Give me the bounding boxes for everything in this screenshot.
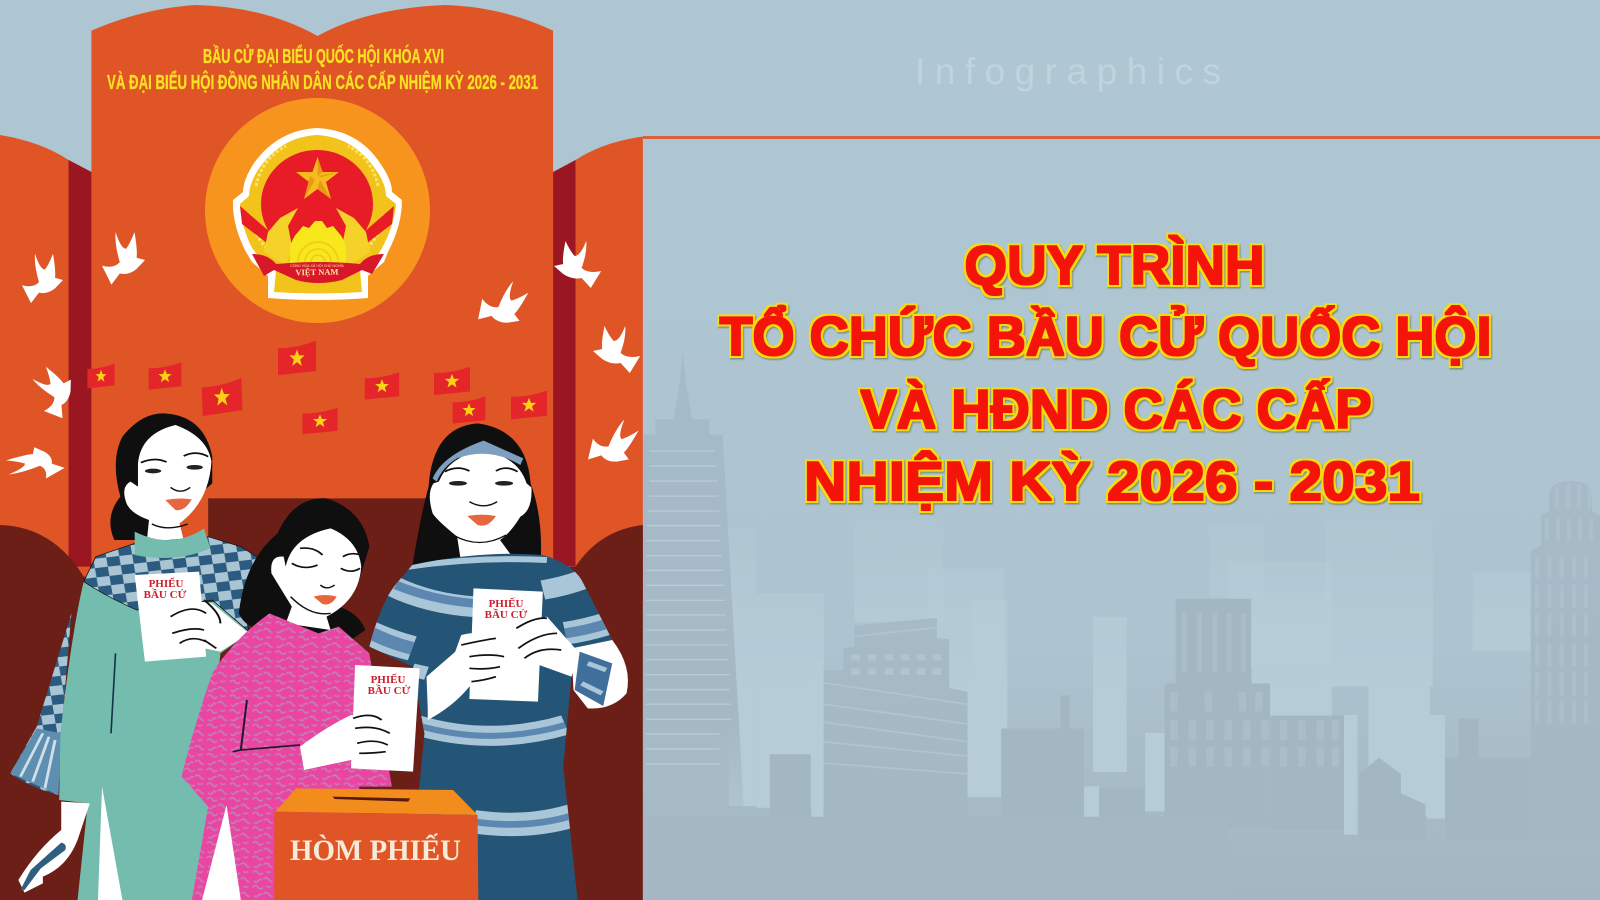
building: stepped block xyxy=(824,618,968,847)
title: NHIỆM KỲ 2026 - 2031 xyxy=(804,450,1420,512)
panel: city skyline background xyxy=(640,352,1600,900)
ballot xyxy=(469,588,543,702)
ballot box xyxy=(274,788,478,900)
ballot labels: PHIẾU xyxy=(489,597,523,610)
ballot labels: BẦU CỬ xyxy=(368,684,411,697)
voter: right woman xyxy=(369,423,628,900)
lower poster and voters xyxy=(0,413,643,900)
title xyxy=(720,234,1492,512)
arm xyxy=(571,640,628,708)
poster heading xyxy=(107,44,538,94)
icons: white doves xyxy=(5,232,646,485)
ballot xyxy=(135,572,206,662)
header rule xyxy=(643,136,1600,139)
national emblem: VIỆT NAM xyxy=(295,267,339,277)
poster heading: VÀ ĐẠI BIỂU HỘI ĐỒNG NHÂN DÂN CÁC CẤP NHIỆM KỲ 2026 - 2031 xyxy=(107,70,538,94)
ballot labels: BẦU CỬ xyxy=(485,608,528,621)
national emblem xyxy=(205,98,430,323)
dress xyxy=(59,582,249,900)
voter: middle woman xyxy=(182,498,420,900)
building: right dome tower xyxy=(1531,481,1600,840)
voter: left woman xyxy=(10,413,259,900)
section label: Infographics: Infographics xyxy=(915,51,1227,92)
poster backdrop xyxy=(0,5,643,600)
ballot labels: BẦU CỬ xyxy=(144,588,187,601)
buildings: front low blocks xyxy=(770,599,1531,859)
national emblem: CỘNG HÒA XÃ HỘI CHỦ NGHĨA xyxy=(290,263,344,268)
ballot labels xyxy=(144,577,528,697)
panel: election poster illustration xyxy=(0,0,646,900)
ballot labels: PHIẾU xyxy=(149,577,183,590)
title: VÀ HĐND CÁC CẤP xyxy=(860,378,1372,440)
maroon base xyxy=(0,498,643,900)
sleeve xyxy=(10,613,71,795)
pink ao dai xyxy=(182,613,392,900)
building: spire tower xyxy=(643,352,744,815)
poster heading: BẦU CỬ ĐẠI BIỂU QUỐC HỘI KHÓA XVI xyxy=(203,44,444,68)
icons: red flags xyxy=(87,341,547,434)
ballot labels: PHIẾU xyxy=(371,673,405,686)
ballot box label: HÒM PHIẾU xyxy=(290,833,461,867)
title: QUY TRÌNH xyxy=(964,234,1264,296)
dress and stripes xyxy=(369,554,612,900)
title: TỔ CHỨC BẦU CỬ QUỐC HỘI xyxy=(720,305,1492,367)
ballot and hand xyxy=(351,665,420,772)
hand and pen xyxy=(18,802,90,893)
scarf xyxy=(84,537,259,632)
